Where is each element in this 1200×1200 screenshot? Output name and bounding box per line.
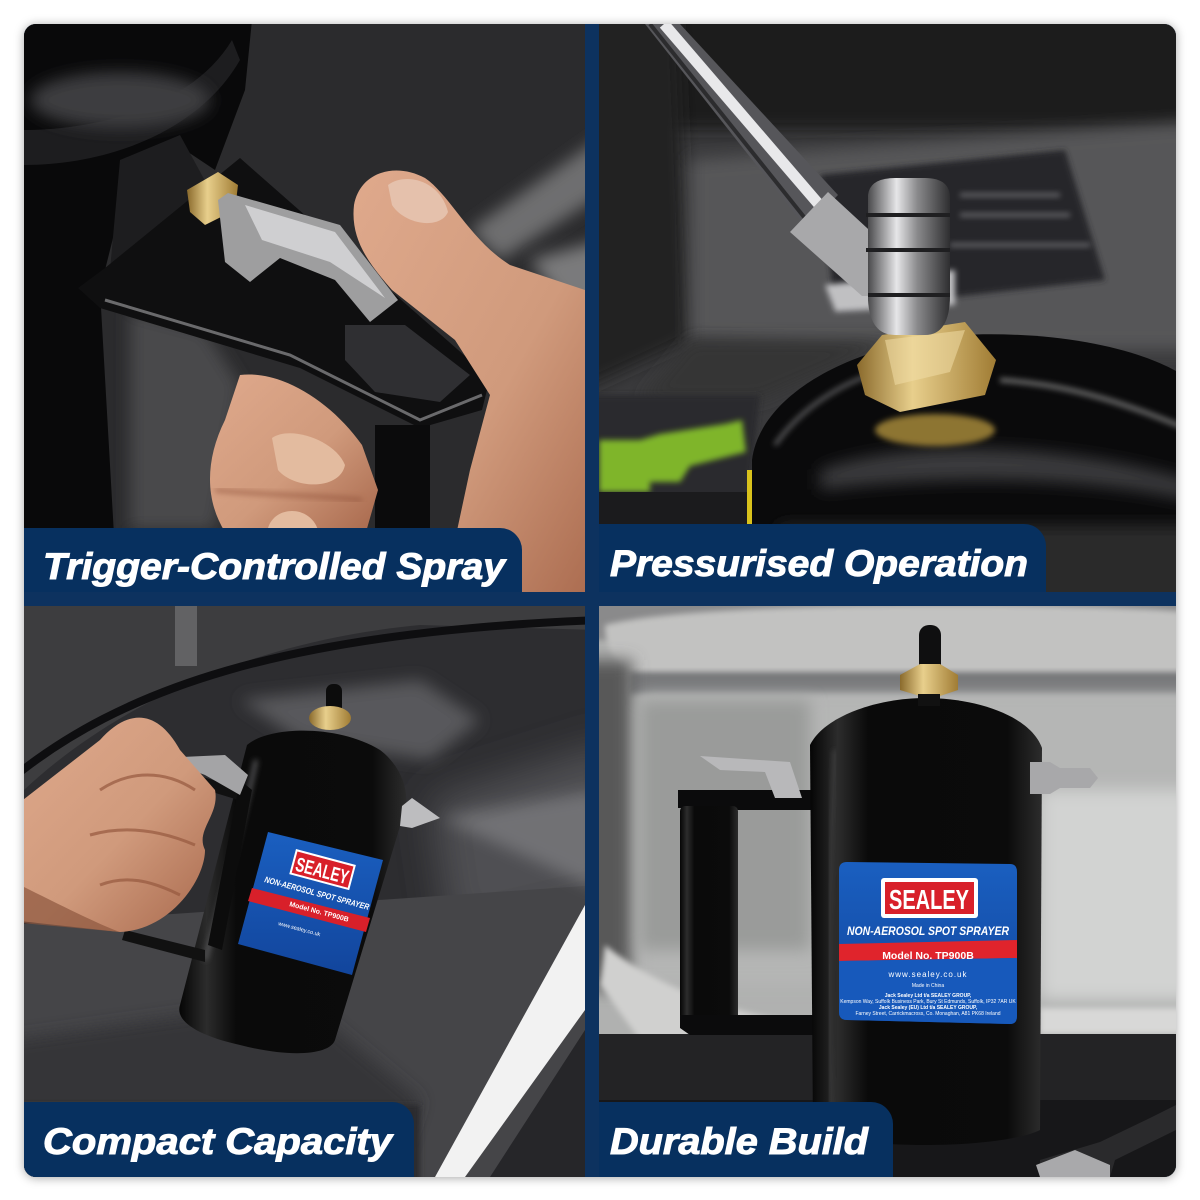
black bottle (810, 698, 1042, 1145)
label: www.sealey.co.uk (888, 970, 968, 979)
panel: durable build (599, 606, 1176, 1177)
black bottle (179, 731, 406, 1053)
caption: Pressurised Operation (610, 543, 1028, 584)
label: Kempson Way, Suffolk Business Park, Bury St Edmunds, Suffolk, IP32 7AR UK (840, 999, 1016, 1005)
green lettering (599, 420, 746, 492)
air gun on bench (1040, 1105, 1176, 1177)
hand (10, 718, 216, 932)
trigger (186, 755, 248, 795)
label (238, 832, 383, 975)
panel: compact capacity (24, 606, 585, 1177)
top valve (919, 625, 941, 664)
caption: Durable Build (610, 1121, 869, 1162)
chrome rod (645, 24, 838, 228)
panel: pressurised operation (599, 24, 1176, 592)
label: NON-AEROSOL SPOT SPRAYER (847, 924, 1009, 938)
hand (353, 171, 600, 610)
blurred data plate (820, 150, 1105, 310)
brass nozzle (187, 172, 238, 225)
label: Made in China (912, 983, 944, 989)
caption (599, 524, 1046, 592)
black tank (752, 334, 1176, 533)
brass hex valve (857, 322, 996, 412)
photo backdrop (599, 606, 1176, 1177)
side nozzle (1030, 762, 1098, 794)
photo backdrop (24, 24, 585, 528)
caption: Compact Capacity (43, 1121, 395, 1162)
handle (204, 777, 235, 798)
handle (678, 790, 815, 1035)
trigger (700, 756, 802, 798)
spray mist (447, 788, 585, 890)
caption (599, 1102, 893, 1177)
label: www.sealey.co.uk (277, 921, 321, 938)
label: NON-AEROSOL SPOT SPRAYER (263, 874, 371, 912)
caption (24, 1102, 414, 1177)
handle bracket (78, 158, 490, 428)
dark bench (599, 1034, 1176, 1177)
photo backdrop (599, 24, 1176, 492)
label: Farney Street, Carrickmacross, Co. Monaghan, A81 PK68 Ireland (855, 1011, 1001, 1017)
windscreen (24, 625, 600, 925)
label: Model No. TP900B (882, 950, 974, 962)
label: Model No. TP900B (288, 901, 349, 924)
label: SEALEY (889, 884, 969, 915)
label: Jack Sealey Ltd t/a SEALEY GROUP, (885, 993, 972, 999)
aluminium trigger (218, 193, 398, 322)
panel: trigger-controlled spray (24, 24, 585, 592)
chrome connector (868, 178, 950, 335)
nozzle (400, 798, 440, 828)
caption: Trigger-Controlled Spray (43, 546, 508, 587)
label (839, 862, 1017, 1024)
label: Jack Sealey (EU) Ltd t/a SEALEY GROUP, (879, 1005, 978, 1011)
black tank (24, 24, 252, 528)
photo backdrop (24, 606, 585, 1177)
top valve (326, 684, 342, 708)
label: SEALEY (293, 854, 351, 889)
alloy wheel (599, 606, 1176, 642)
car bonnet (24, 888, 585, 1177)
caption (24, 528, 522, 592)
